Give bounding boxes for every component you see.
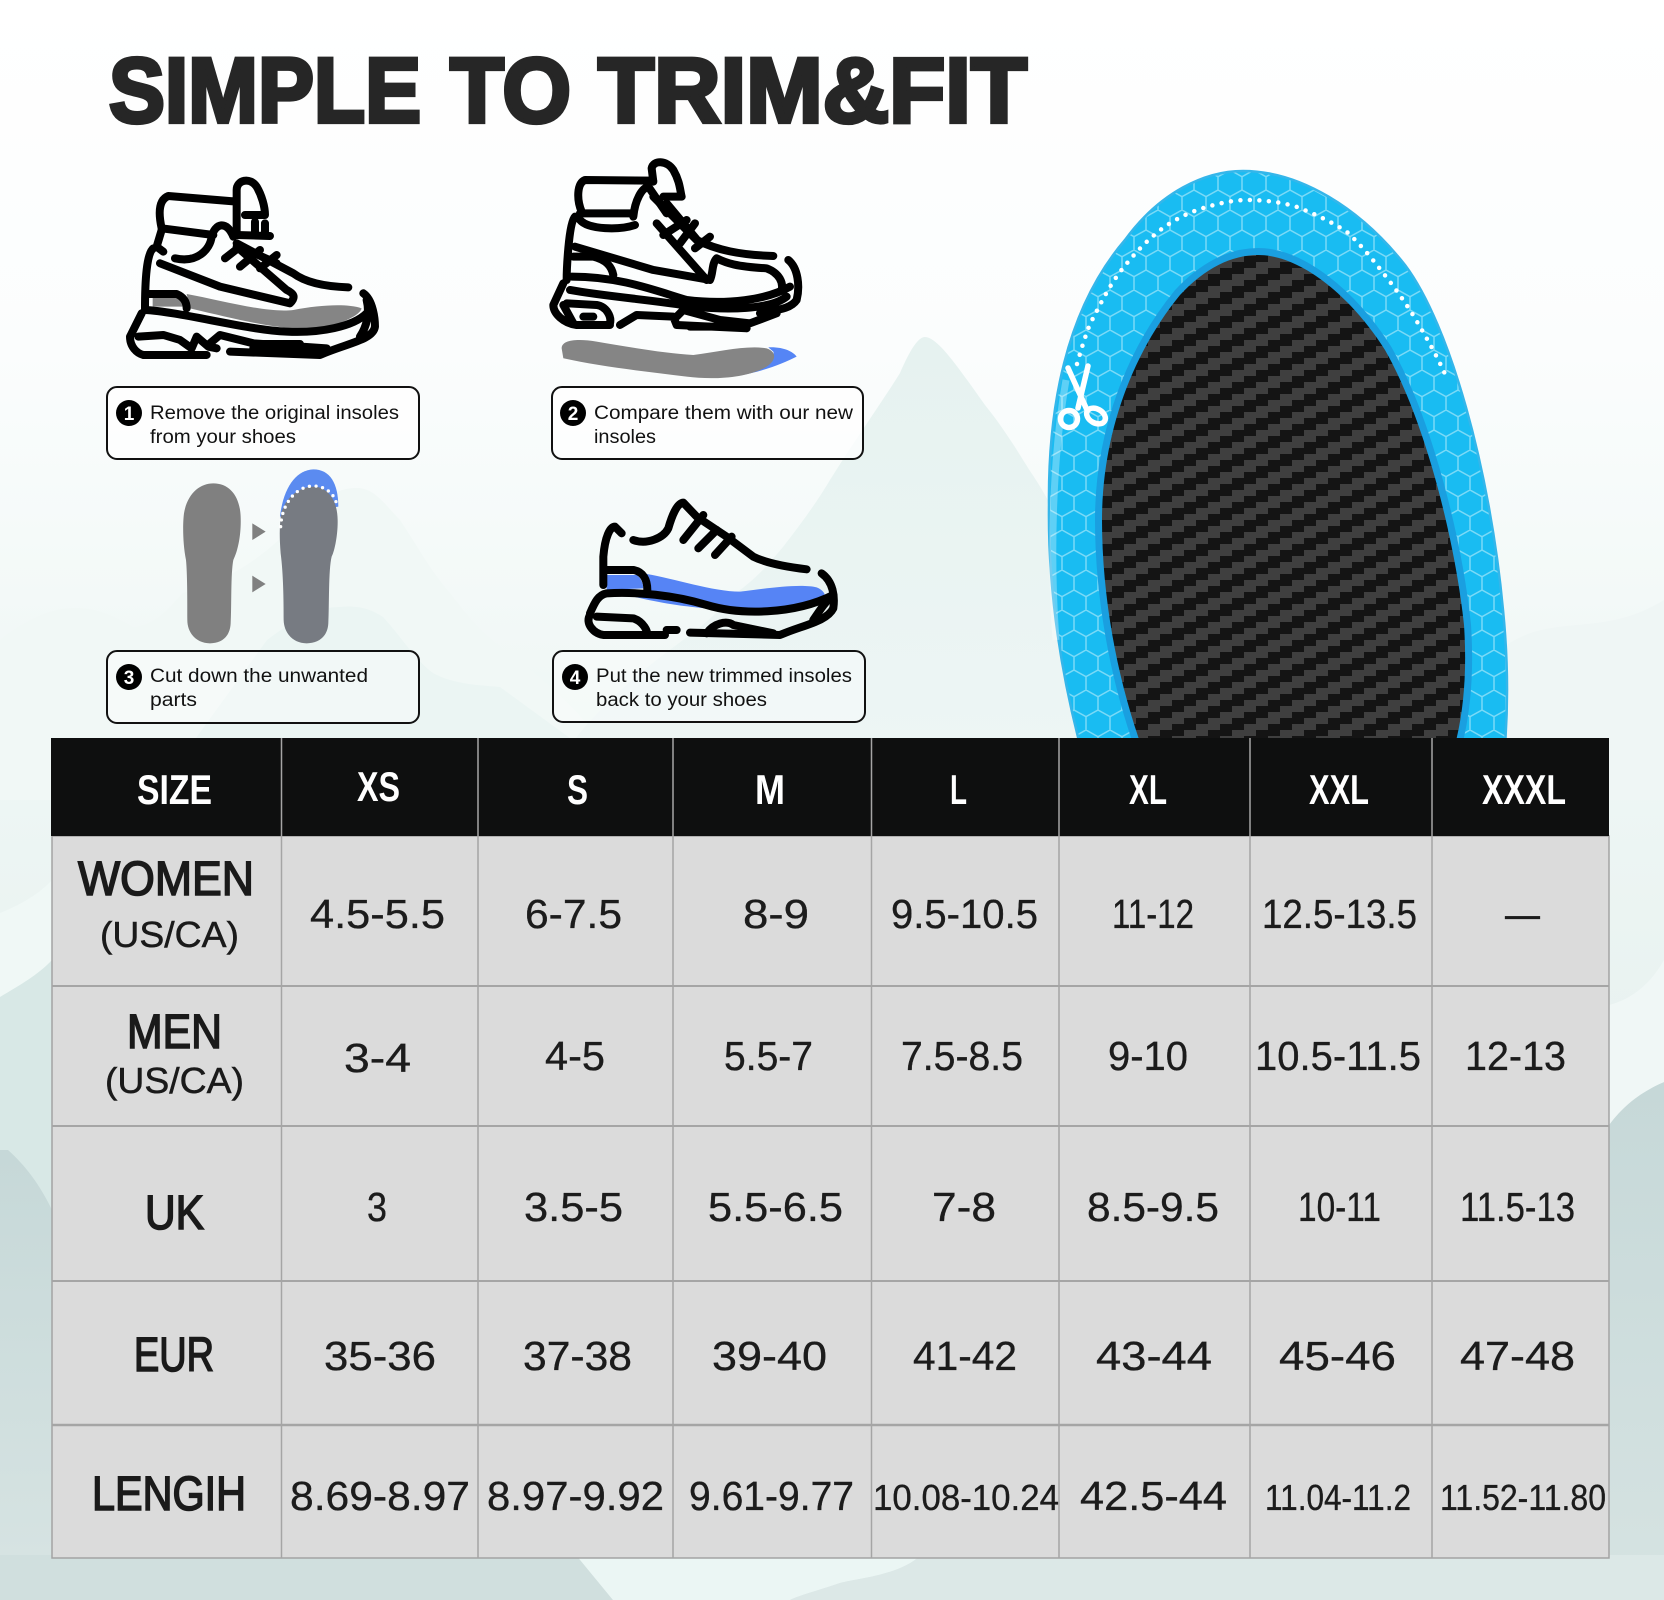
step 2 number (560, 400, 586, 426)
row: men: (US/CA) (105, 1060, 244, 1101)
row: EUR: 43-44 (1096, 1333, 1212, 1379)
illustration: boot with grey insole (130, 181, 375, 355)
step 3 number: 3 (124, 668, 134, 689)
step 3 text (150, 666, 368, 711)
row: men: 3-4 (344, 1035, 411, 1081)
row: EUR: EUR (134, 1329, 214, 1382)
step 3 text: Cut down the unwanted (150, 666, 368, 687)
step 1 text: from your shoes (150, 427, 296, 448)
row: women: 11-12 (1112, 891, 1194, 937)
row: UK: 5.5-6.5 (708, 1184, 843, 1230)
step 4 text (596, 666, 852, 711)
row: UK (145, 1184, 1575, 1240)
table grid (51, 738, 1609, 1558)
row: EUR (134, 1329, 1575, 1382)
row: length: 11.52-11.80 (1440, 1477, 1606, 1518)
row: men: 7.5-8.5 (901, 1033, 1023, 1079)
row: length: 11.04-11.2 (1265, 1477, 1411, 1518)
row: length: 8.97-9.92 (487, 1473, 664, 1519)
row: EUR: 41-42 (913, 1333, 1017, 1379)
row: men: 10.5-11.5 (1255, 1033, 1421, 1079)
side view of insoles (562, 340, 797, 378)
row: women (78, 853, 1540, 955)
row: UK: 7-8 (932, 1184, 996, 1230)
row: length (92, 1468, 1606, 1521)
illustration: two insoles compared (183, 469, 338, 643)
row: men: 9-10 (1108, 1033, 1188, 1079)
title (109, 40, 1027, 142)
row: length: 10.08-10.24 (873, 1477, 1059, 1518)
header row: XL (1129, 766, 1167, 813)
step 2 text: insoles (594, 427, 656, 448)
header row: XXL (1309, 766, 1369, 813)
header row: XS (357, 763, 400, 810)
row: UK: 10-11 (1298, 1184, 1381, 1230)
new insole with trim line (280, 469, 338, 643)
size table (51, 738, 1609, 1558)
carbon fibre centre (1102, 255, 1465, 745)
step 1 callout (107, 387, 419, 459)
row: women: (US/CA) (100, 914, 239, 955)
icon: scissors (1057, 366, 1108, 431)
step 1 text (150, 403, 399, 448)
row: EUR: 39-40 (712, 1333, 827, 1379)
step 4 number (562, 664, 588, 690)
row: UK: UK (145, 1187, 204, 1240)
header row (137, 763, 1566, 813)
row: length: 42.5-44 (1080, 1473, 1227, 1519)
step 2 text: Compare them with our new (594, 403, 853, 424)
row: women: WOMEN (78, 853, 254, 906)
header row: M (755, 766, 785, 813)
illustration: boot above old insole (553, 162, 798, 378)
header row: S (567, 766, 588, 813)
row: UK: 11.5-13 (1460, 1184, 1575, 1230)
row: length: LENGIH (92, 1468, 246, 1521)
illustration: sneaker with blue insole (589, 503, 834, 635)
row: men (105, 1006, 1566, 1101)
step 1 number: 1 (124, 404, 135, 425)
step 3 number (116, 664, 142, 690)
row: women: 6-7.5 (525, 891, 622, 937)
step 2 text (594, 403, 853, 448)
row: length: 9.61-9.77 (689, 1473, 854, 1519)
row: men: 12-13 (1465, 1033, 1566, 1079)
step 4 number: 4 (570, 668, 581, 689)
row: men: 4-5 (545, 1033, 605, 1079)
row: EUR: 35-36 (324, 1333, 436, 1379)
title: TRIM&FIT (598, 40, 1027, 142)
row: UK: 8.5-9.5 (1087, 1184, 1219, 1230)
row: EUR: 47-48 (1460, 1333, 1575, 1379)
row: men: MEN (127, 1006, 222, 1059)
row: UK: 3 (367, 1184, 387, 1230)
step 2 callout (552, 387, 863, 459)
arrows (252, 523, 266, 592)
header row: L (950, 766, 967, 813)
step 3 callout (107, 651, 419, 723)
header row: XXXL (1482, 766, 1566, 813)
trim dotted line (1077, 200, 1445, 374)
step 1 number (116, 400, 142, 426)
row: women: 4.5-5.5 (310, 891, 445, 937)
old insole (183, 483, 241, 643)
row: EUR: 37-38 (523, 1333, 632, 1379)
row: women: 12.5-13.5 (1262, 891, 1417, 937)
step 4 text: back to your shoes (596, 690, 767, 711)
row: length: 8.69-8.97 (290, 1473, 470, 1519)
step 3 text: parts (150, 690, 197, 711)
row: women: 8-9 (743, 891, 809, 937)
row: women: — (1505, 891, 1540, 937)
row: men: 5.5-7 (724, 1033, 813, 1079)
step 4 text: Put the new trimmed insoles (596, 666, 852, 687)
step 4 callout (553, 651, 865, 722)
product: blue gel carbon insole (1049, 171, 1507, 745)
row: women: 9.5-10.5 (891, 891, 1038, 937)
header row: SIZE (137, 766, 212, 813)
title: TO (450, 40, 571, 142)
step 1 text: Remove the original insoles (150, 403, 399, 424)
row: EUR: 45-46 (1279, 1333, 1396, 1379)
title: SIMPLE (109, 40, 421, 142)
step 2 number: 2 (568, 404, 578, 425)
row: UK: 3.5-5 (524, 1184, 623, 1230)
